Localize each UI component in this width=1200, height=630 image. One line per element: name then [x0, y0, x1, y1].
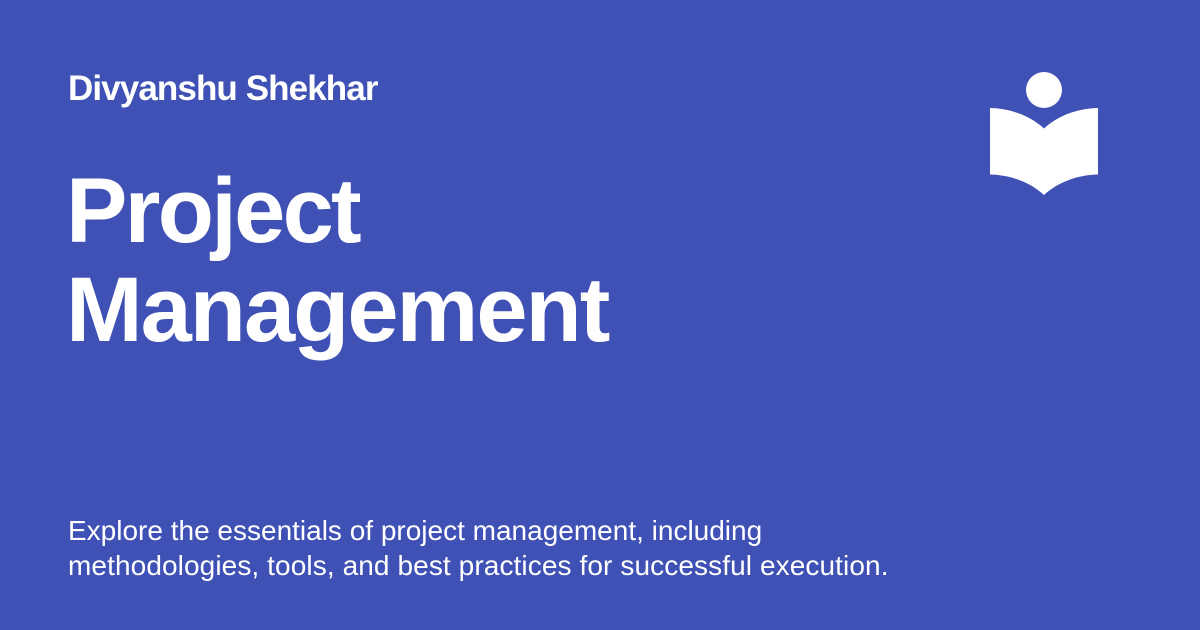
- description: [68, 515, 889, 581]
- title: [66, 160, 610, 361]
- icon: open book with reader: [990, 72, 1098, 195]
- description: Explore the essentials of project management, including: [68, 515, 762, 546]
- title: Management: [66, 259, 608, 361]
- description: methodologies, tools, and best practices for successful execution.: [68, 550, 889, 581]
- author name: Divyanshu Shekhar: [68, 69, 378, 108]
- title: Project: [66, 160, 359, 262]
